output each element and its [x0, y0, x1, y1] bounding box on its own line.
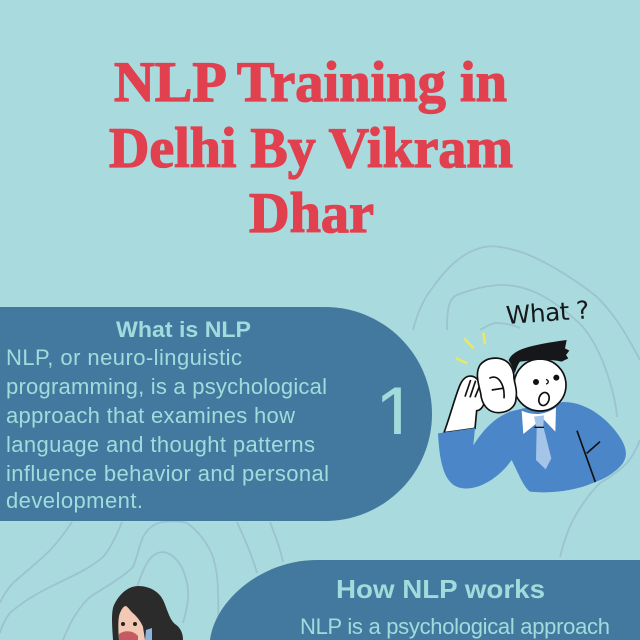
speech text: What?: What ?	[505, 295, 590, 330]
hair	[509, 340, 569, 373]
title	[109, 51, 513, 245]
number 1: 1	[375, 372, 417, 457]
jacket	[438, 402, 626, 492]
head	[514, 359, 566, 411]
pocket lines	[577, 431, 600, 482]
ear	[477, 358, 516, 413]
panel: what is NLP	[0, 307, 432, 521]
text block: NLP definition: approach that examines how	[6, 403, 295, 428]
text block: NLP definition: programming, is a psychological	[6, 374, 327, 399]
text block: NLP definition: development.	[6, 488, 143, 513]
arm and hand	[444, 376, 485, 433]
title: NLP Training in	[114, 51, 507, 114]
text block: NLP definition: NLP, or neuro-linguistic	[6, 345, 242, 370]
title: Dhar	[249, 182, 374, 245]
icon: man listening	[438, 295, 626, 492]
icon: woman thinking	[112, 586, 183, 640]
text block: NLP definition	[6, 345, 329, 513]
heading: what is NLP: What is NLP	[116, 317, 251, 342]
text block: NLP definition: influence behavior and personal	[6, 461, 329, 486]
collar	[522, 407, 556, 434]
text block: NLP explanation: NLP is a psychological approach	[300, 614, 610, 639]
sound marks	[456, 333, 485, 363]
heading: how NLP works: How NLP works	[336, 574, 545, 604]
face	[533, 379, 539, 385]
tie	[534, 415, 551, 469]
title: Delhi By Vikram	[109, 117, 513, 180]
text block: NLP definition: language and thought patterns	[6, 432, 315, 457]
panel: how NLP works	[210, 560, 640, 640]
